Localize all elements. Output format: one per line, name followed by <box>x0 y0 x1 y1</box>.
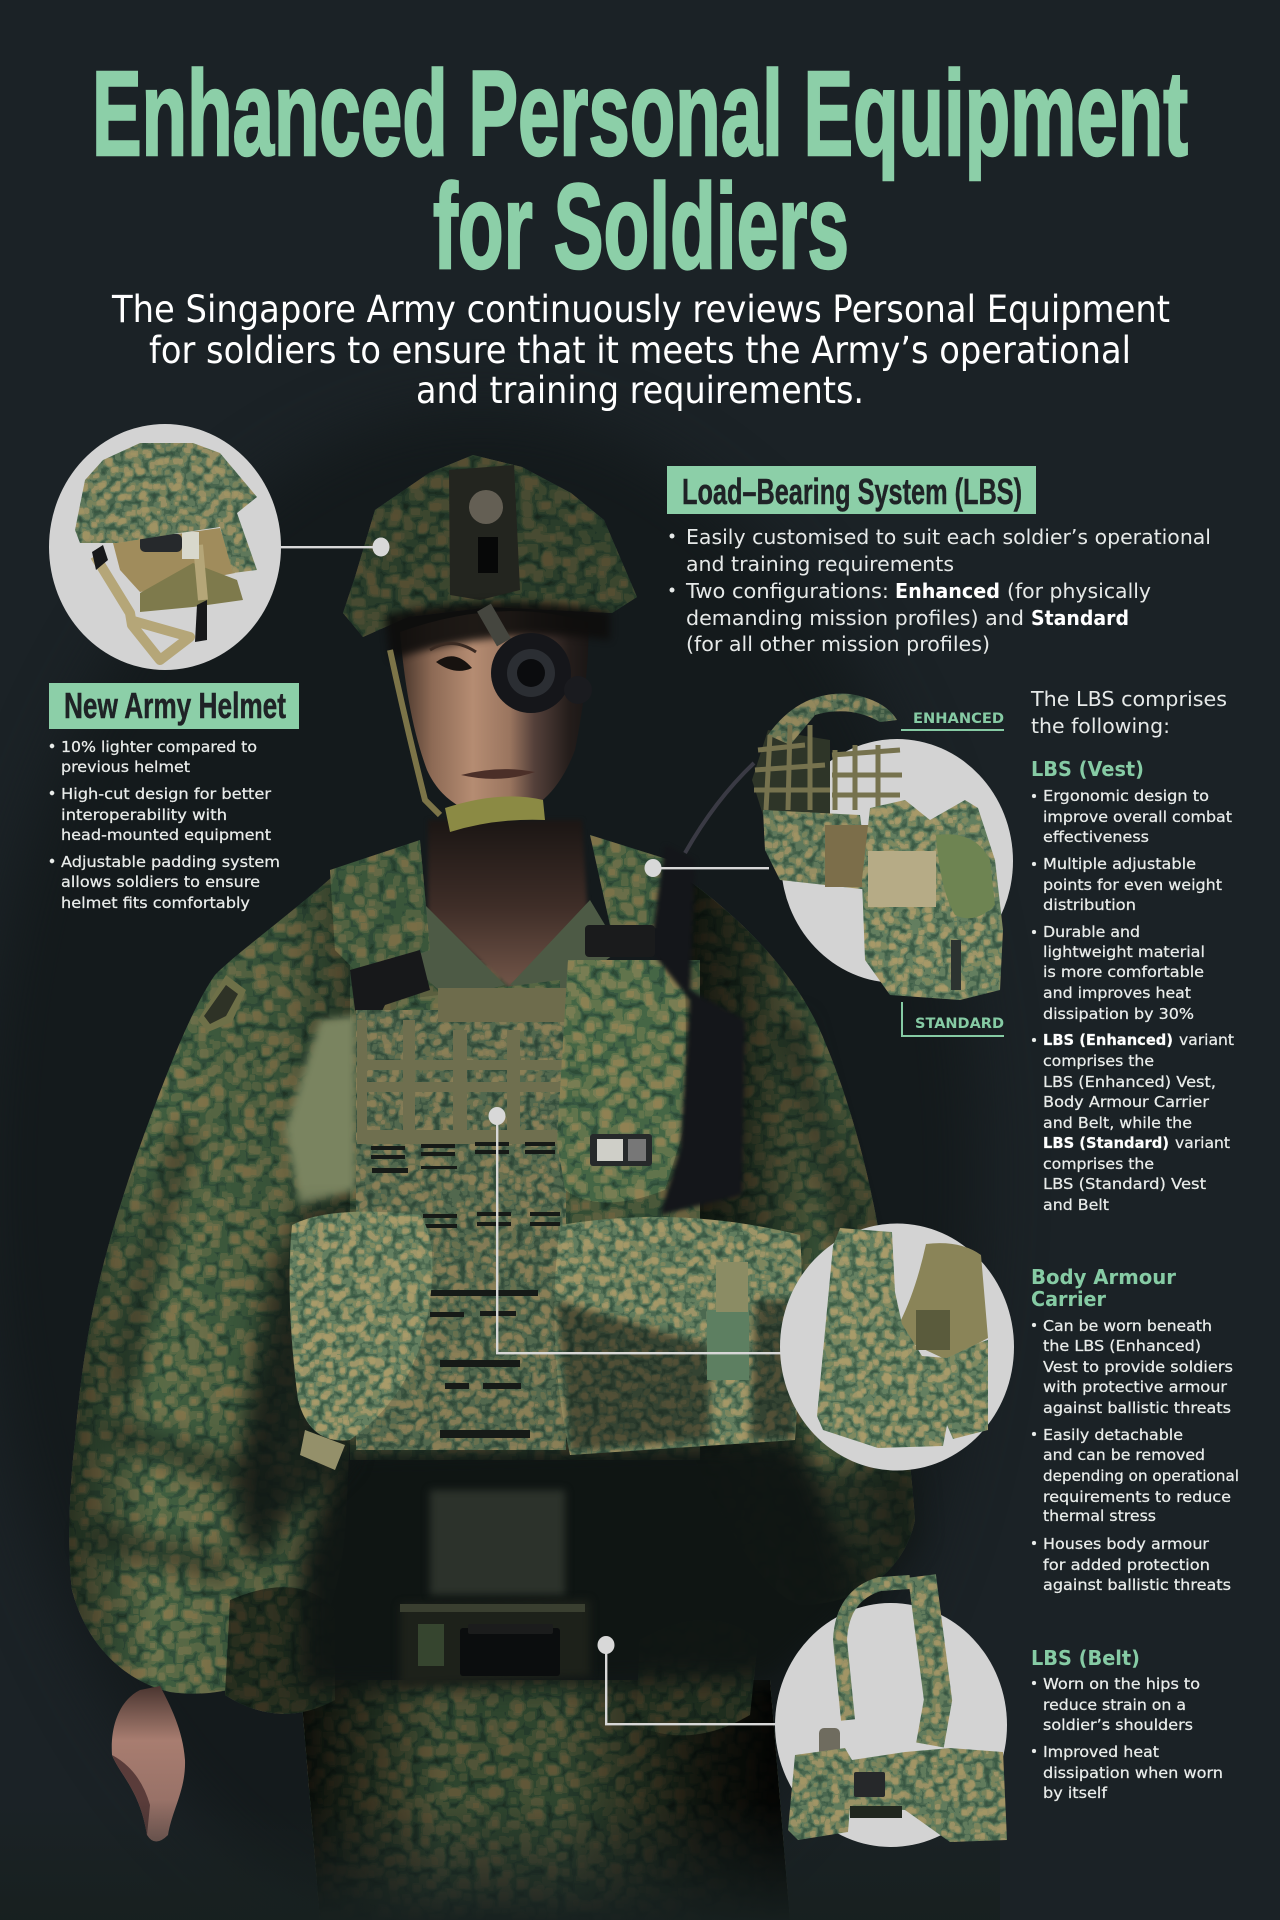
helmet connector and dot <box>281 538 390 556</box>
LBS vest bullets: comprises the <box>1043 1052 1154 1070</box>
bottom fade <box>0 1800 1000 1920</box>
face <box>400 611 588 816</box>
LBS vest bullets: Multiple adjustable <box>1043 855 1196 873</box>
body armour heading: Body Armour <box>1031 1265 1176 1289</box>
helmet bullet list: helmet fits comfortably <box>61 894 250 912</box>
belt bullets: by itself <box>1043 1784 1108 1802</box>
body armour bullets: Easily detachable <box>1043 1426 1183 1444</box>
heading: Load-Bearing System: Load–Bearing System (LBS) <box>682 471 1022 512</box>
LBS vest bullets: variant <box>1175 1134 1230 1152</box>
body armour bullets: the LBS (Enhanced) <box>1043 1337 1201 1355</box>
LBS vest bullets: dissipation by 30% <box>1043 1005 1194 1023</box>
LBS vest bullets: points for even weight <box>1043 876 1222 894</box>
LBS intro bullets: and training requirements <box>686 552 954 576</box>
carrier body <box>817 1228 988 1448</box>
vest callout circle <box>752 694 1013 1000</box>
carrier inner lining <box>900 1243 988 1360</box>
body armour bullets: Can be worn beneath <box>1043 1317 1212 1335</box>
hand <box>112 1686 185 1842</box>
belt straps <box>840 1576 938 1745</box>
LBS vest bullets: LBS (Standard) <box>1043 1134 1169 1152</box>
belt circle <box>775 1576 1007 1847</box>
LBS vest bullets: LBS (Enhanced) <box>1043 1031 1173 1049</box>
helmet bullet list: High-cut design for better <box>61 785 272 803</box>
eye <box>430 643 476 671</box>
body armour bullets: depending on operational <box>1043 1467 1239 1485</box>
standard vest <box>862 800 1003 1000</box>
belt and buckle <box>400 1600 590 1686</box>
LBS comprises intro: the following: <box>1031 714 1170 738</box>
side release buckle left <box>350 950 430 1025</box>
enhanced label: ENHANCED <box>913 711 1004 727</box>
body armour bullets: against ballistic threats <box>1043 1399 1231 1417</box>
canteen <box>819 1728 840 1756</box>
velcro patch <box>438 988 566 1022</box>
LBS intro bullets: Enhanced <box>895 579 1000 603</box>
belt bullets: Improved heat <box>1043 1743 1159 1761</box>
body armour bullets: for added protection <box>1043 1556 1210 1574</box>
shoulder patch <box>198 975 246 1032</box>
soldier figure <box>0 455 1000 1920</box>
helmet bullet list: previous helmet <box>61 758 190 776</box>
LBS vest bullets: and Belt <box>1043 1196 1109 1214</box>
LBS intro bullets <box>670 525 1211 656</box>
mouth <box>461 769 535 779</box>
undershirt <box>430 1490 565 1595</box>
body armour connector and dot <box>488 1107 782 1354</box>
lower right arm dim <box>770 1470 920 1610</box>
subtitle: for soldiers to ensure that it meets the Army’s operational <box>149 329 1131 372</box>
body armour bullets: and can be removed <box>1043 1446 1205 1464</box>
radio pouch <box>557 845 745 1215</box>
helmet bullet list: head-mounted equipment <box>61 826 271 844</box>
belt bullets: reduce strain on a <box>1043 1696 1186 1714</box>
title <box>92 45 1188 294</box>
standard label <box>902 1002 1004 1036</box>
heading: New Army Helmet: New Army Helmet <box>64 685 286 726</box>
enhanced vest <box>752 694 902 890</box>
belt pouches <box>788 1748 1007 1842</box>
dark waist and torso shadow <box>300 1440 860 1690</box>
mount disc <box>469 490 503 524</box>
LBS vest bullets: Body Armour Carrier <box>1043 1093 1210 1111</box>
body armour bullets: with protective armour <box>1043 1378 1228 1396</box>
LBS vest bullets: distribution <box>1043 896 1136 914</box>
subtitle <box>111 288 1170 412</box>
LBS intro bullets: Easily customised to suit each soldier’s operational <box>686 525 1211 549</box>
belt heading: LBS (Belt) <box>1031 1646 1140 1670</box>
collar <box>405 900 620 1000</box>
belt bullets: dissipation when worn <box>1043 1764 1223 1782</box>
body armour bullets: requirements to reduce <box>1043 1488 1231 1506</box>
vest connector and dot <box>644 859 769 877</box>
LBS intro bullets: Standard <box>1031 606 1129 630</box>
belt buckle <box>854 1772 885 1797</box>
LBS comprises intro: The LBS comprises <box>1030 687 1227 711</box>
green side buckle <box>707 1262 749 1380</box>
helmet shadow on forehead <box>385 602 610 660</box>
LBS vest bullets: comprises the <box>1043 1155 1154 1173</box>
LBS vest bullets: variant <box>1179 1031 1234 1049</box>
top buckle <box>585 925 655 957</box>
neck <box>428 820 588 988</box>
body armour bullets: Houses body armour <box>1043 1535 1210 1553</box>
right utility pouch <box>554 1217 802 1455</box>
chest plate <box>356 988 566 1450</box>
LBS vest bullets: lightweight material <box>1043 943 1205 961</box>
LBS vest heading: LBS (Vest) <box>1031 757 1144 781</box>
body armour bullets: thermal stress <box>1043 1507 1156 1525</box>
body armour carrier circle <box>780 1224 1014 1470</box>
LBS vest bullets: Ergonomic design to <box>1043 787 1209 805</box>
helmet bullet list <box>50 738 280 912</box>
standard label: STANDARD <box>915 1016 1004 1032</box>
LBS intro bullets: (for all other mission profiles) <box>686 632 990 656</box>
lower slots <box>371 1142 560 1438</box>
title: for Soldiers <box>433 158 849 294</box>
LBS intro bullets: demanding mission profiles) and <box>686 606 1024 630</box>
LBS vest bullets: Durable and <box>1043 923 1140 941</box>
carrier velcro <box>916 1310 950 1350</box>
helmet bullet list: Adjustable padding system <box>61 853 280 871</box>
LBS comprises intro <box>1030 687 1227 738</box>
LBS vest bullets: LBS (Standard) Vest <box>1043 1175 1206 1193</box>
black cable bundle <box>650 845 745 1215</box>
night vision device <box>477 604 592 713</box>
helmet padding and straps <box>92 528 243 660</box>
shadow on left flank <box>230 1210 350 1560</box>
left magazine pouch <box>290 1212 432 1470</box>
soldier helmet <box>343 455 637 637</box>
subtitle: and training requirements. <box>416 369 864 412</box>
belt bullets <box>1032 1675 1223 1802</box>
soldier uniform camouflage <box>69 860 915 1920</box>
LBS vest bullets: effectiveness <box>1043 828 1149 846</box>
pouch buckle <box>590 1134 652 1166</box>
LBS vest bullets: and Belt, while the <box>1043 1114 1192 1132</box>
under belt shade <box>850 1806 902 1818</box>
helmet mount <box>449 465 520 600</box>
heading: Load-Bearing System <box>667 466 1036 514</box>
body armour bullets: Vest to provide soldiers <box>1043 1358 1233 1376</box>
body armour heading <box>1031 1265 1176 1311</box>
LBS vest bullets: improve overall combat <box>1043 808 1232 826</box>
LBS vest bullets: LBS (Enhanced) Vest, <box>1043 1073 1216 1091</box>
LBS intro bullets: (for physically <box>1007 579 1151 603</box>
chin strap <box>390 650 545 832</box>
helmet callout circle <box>49 424 281 670</box>
sleeve fold shadows <box>90 1020 870 1590</box>
subtitle: The Singapore Army continuously reviews Personal Equipment <box>111 288 1170 331</box>
body armour heading: Carrier <box>1031 1287 1106 1311</box>
LBS vest bullets: is more comfortable <box>1043 963 1204 981</box>
body armour bullets <box>1032 1317 1239 1594</box>
mount slot <box>478 537 498 573</box>
nose <box>480 730 526 736</box>
helmet bullet list: interoperability with <box>61 806 227 824</box>
helmet bullet list: 10% lighter compared to <box>61 738 257 756</box>
heading: New Army Helmet <box>49 683 299 729</box>
olive sleeve panel <box>285 1015 356 1205</box>
helmet bullet list: allows soldiers to ensure <box>61 873 260 891</box>
helmet shell <box>75 443 257 573</box>
antenna wire <box>685 763 754 853</box>
body armour bullets: against ballistic threats <box>1043 1576 1231 1594</box>
shoulder straps <box>330 835 682 1040</box>
belt connector and dot <box>598 1636 777 1725</box>
LBS intro bullets: Two configurations: <box>685 579 889 603</box>
hand shading <box>112 1755 150 1835</box>
upper grid <box>357 1020 565 1144</box>
LBS vest bullets <box>1032 787 1234 1214</box>
belt bullets: Worn on the hips to <box>1043 1675 1200 1693</box>
belt bullets: soldier’s shoulders <box>1043 1716 1193 1734</box>
LBS vest bullets: and improves heat <box>1043 984 1191 1002</box>
backdrop shadow around soldier <box>0 410 980 1920</box>
